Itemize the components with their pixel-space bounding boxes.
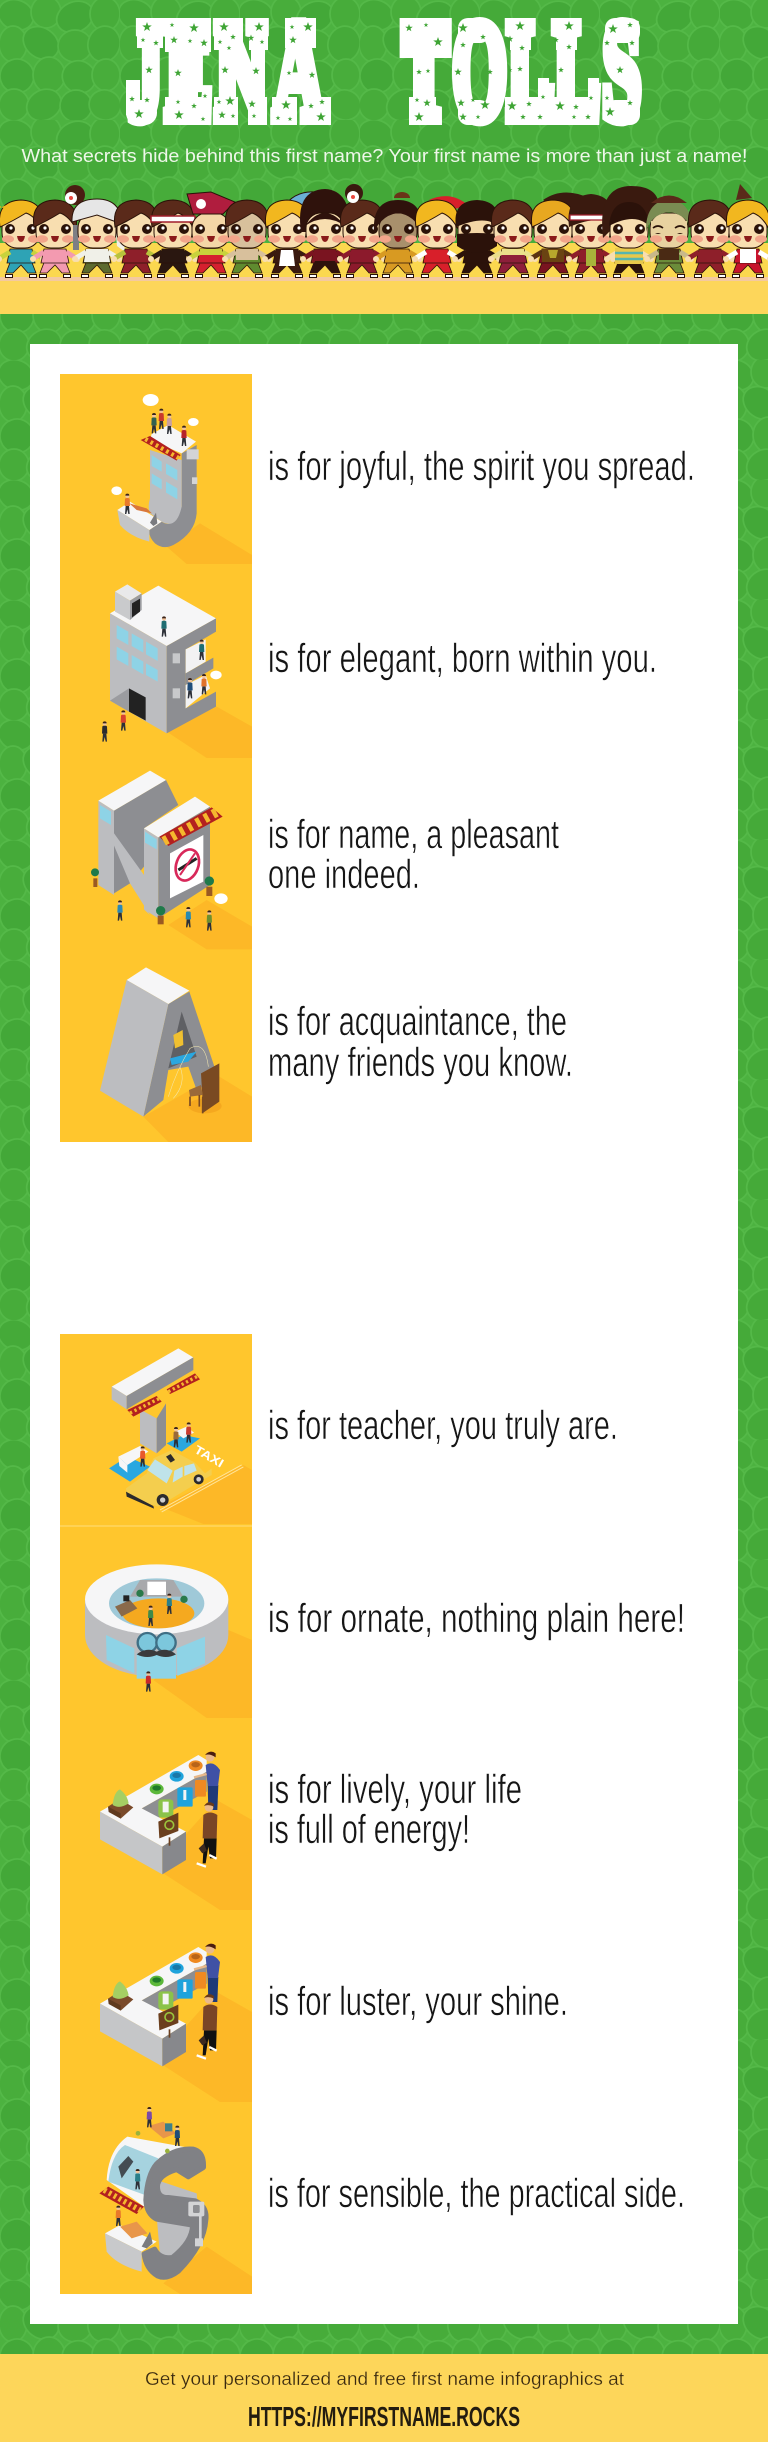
text: A lines — [268, 998, 573, 1085]
character 13 — [452, 200, 502, 276]
character 18 — [644, 196, 694, 276]
character 9 — [300, 189, 351, 276]
character 15 — [528, 192, 589, 276]
text: L lively lines: is for lively, your life — [268, 1766, 522, 1812]
character 2 — [30, 185, 85, 276]
text: N lines: one indeed. — [268, 851, 420, 897]
character 6 — [186, 192, 236, 276]
character 10 — [337, 184, 387, 276]
text: N lines — [268, 811, 559, 897]
character 16 — [566, 194, 616, 276]
text: L luster line: is for luster, your shine. — [268, 1978, 568, 2024]
text: L lively lines — [268, 1766, 522, 1852]
text: N lines: is for name, a pleasant — [268, 811, 559, 857]
text: A lines: is for acquaintance, the — [268, 998, 567, 1044]
panel: letter S — [60, 2102, 252, 2294]
text: L lively lines: is full of energy! — [268, 1806, 470, 1852]
character 4 — [111, 200, 161, 276]
footer — [0, 2354, 768, 2442]
white content panel — [30, 344, 738, 2324]
panel: letter T — [60, 1334, 252, 1526]
subtitle: What secrets hide behind this first name? Your first name is more than just a name! — [22, 145, 748, 166]
illustration: recycling counter L — [100, 1752, 252, 1910]
character 3 — [72, 199, 125, 276]
text: A lines: many friends you know. — [268, 1039, 573, 1085]
panel: letter A — [60, 950, 252, 1142]
character 8 — [262, 192, 327, 276]
TAXI road marking: TAXI — [192, 1442, 226, 1470]
yellow band under characters — [0, 243, 768, 314]
character 11 — [373, 192, 423, 276]
character 14 — [488, 200, 538, 276]
character 19 — [685, 200, 735, 276]
stars on title letters — [129, 21, 635, 121]
footer call to action: Get your personalized and free first name infographics at — [145, 2369, 624, 2389]
panel: letter N — [60, 758, 252, 950]
character 20 — [723, 184, 768, 276]
panel: letter E — [60, 566, 252, 758]
slab serif blocks behind the title letters — [126, 18, 640, 125]
character 1 — [0, 200, 46, 276]
title — [126, 0, 641, 150]
character 5 — [148, 200, 198, 276]
text: T line: is for teacher, you truly are. — [268, 1402, 618, 1448]
panel: letter J — [60, 374, 252, 566]
character 12 — [412, 196, 469, 276]
panel: letter L (lively) — [60, 1718, 252, 1910]
row of cartoon characters — [0, 184, 768, 276]
footer URL: HTTPS://MYFIRSTNAME.ROCKS — [248, 2401, 520, 2432]
panel: letter O — [60, 1526, 252, 1718]
panel: letter L (luster) — [60, 1910, 252, 2102]
character 7 — [222, 200, 272, 276]
character 17 — [602, 186, 659, 276]
